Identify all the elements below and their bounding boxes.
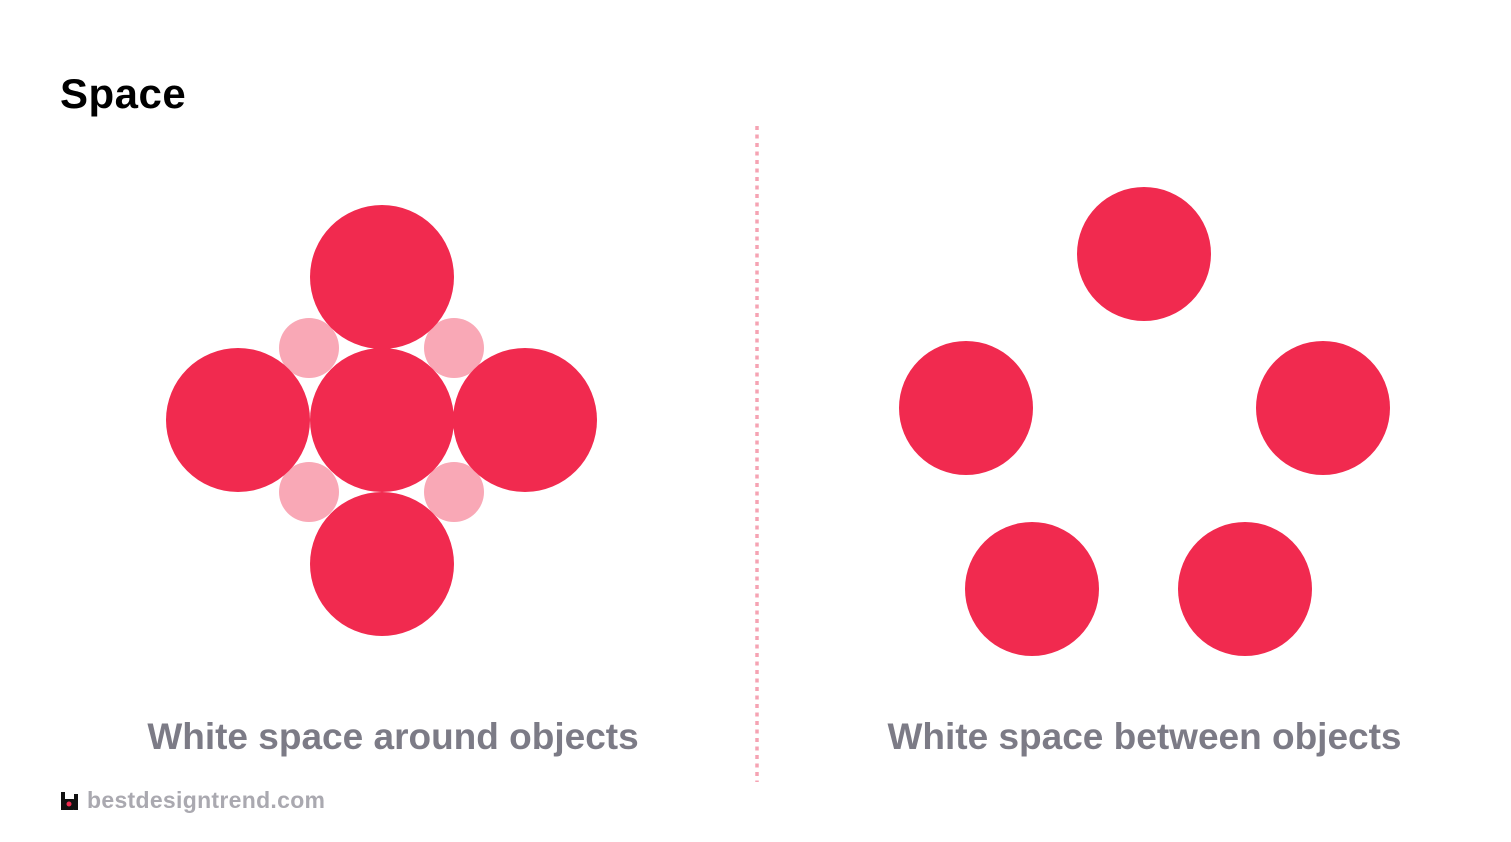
caption right: White space between objects — [887, 716, 1402, 757]
footer text: bestdesigntrend.com — [87, 787, 325, 813]
title: Space — [60, 70, 186, 117]
caption left: White space around objects — [147, 716, 639, 757]
footer logo — [61, 787, 325, 813]
divider — [755, 126, 759, 782]
icon: logo — [61, 792, 78, 810]
